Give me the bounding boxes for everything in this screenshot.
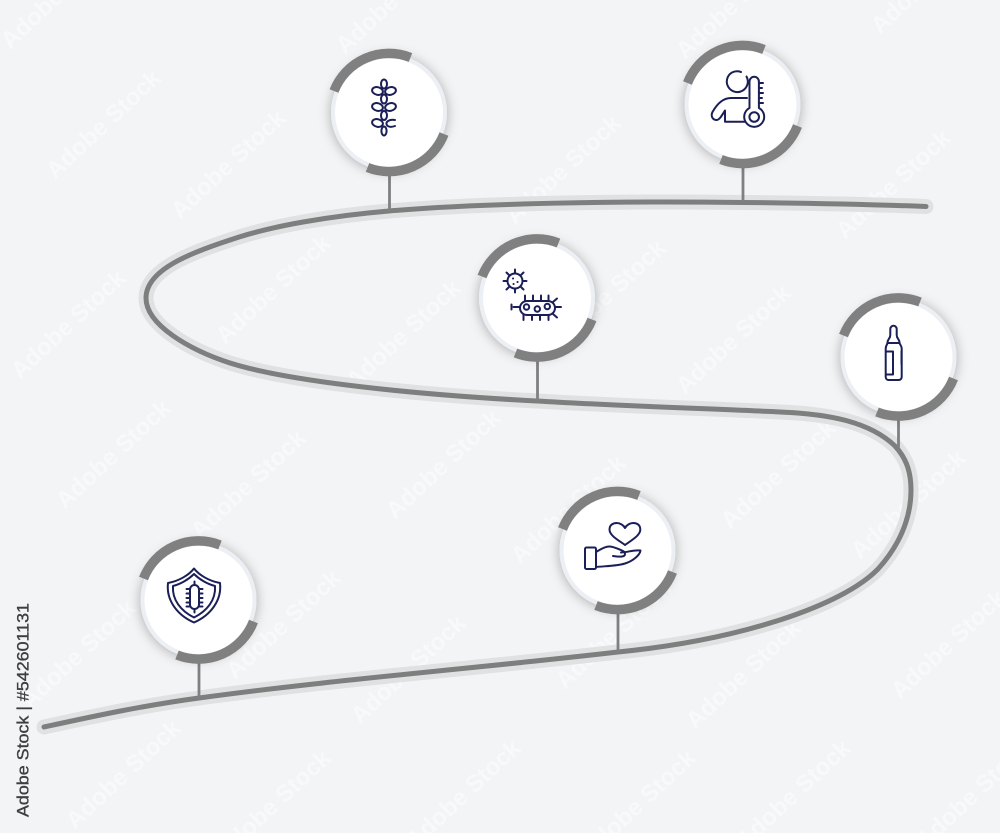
watermark pattern: Adobe Stock xyxy=(346,609,472,729)
watermark pattern: Adobe Stock xyxy=(41,64,167,184)
watermark pattern: Adobe Stock xyxy=(221,564,347,684)
watermark pattern: Adobe Stock xyxy=(51,394,177,514)
watermark pattern: Adobe Stock xyxy=(61,714,187,833)
watermark pattern: Adobe Stock xyxy=(681,614,807,734)
watermark pattern: Adobe Stock xyxy=(846,444,972,564)
watermark pattern: Adobe Stock xyxy=(186,424,312,544)
watermark pattern: Adobe Stock xyxy=(546,234,672,354)
watermark pattern: Adobe Stock xyxy=(211,229,337,349)
watermark pattern: Adobe Stock xyxy=(501,109,627,229)
icon: person and thermometer xyxy=(712,71,764,127)
icon: hand with heart xyxy=(585,523,640,569)
node: ampoule xyxy=(840,298,956,416)
icon: shield with bacterium xyxy=(168,568,220,622)
winding road timeline path xyxy=(44,202,926,727)
node: person with thermometer xyxy=(684,45,800,164)
watermark pattern: Adobe Stock xyxy=(16,594,142,714)
connector stems xyxy=(199,162,898,698)
watermark pattern: Adobe Stock xyxy=(6,264,132,384)
icon: virus and bacterium xyxy=(504,270,561,320)
node: shield with bacterium xyxy=(140,541,256,659)
node: hand holding heart xyxy=(560,491,676,610)
icon: wheat ear xyxy=(371,80,397,136)
watermark pattern: Adobe Stock xyxy=(671,279,797,399)
node: wheat xyxy=(331,53,447,172)
watermark pattern: Adobe Stock xyxy=(831,124,957,244)
node: viruses and bacteria xyxy=(479,239,595,357)
vertical stock credit text: Adobe Stock | #542601131 xyxy=(14,603,32,817)
watermark pattern: Adobe Stock xyxy=(341,274,467,394)
icon: glass ampoule xyxy=(886,326,902,380)
watermark pattern: Adobe Stock xyxy=(506,449,632,569)
watermark pattern: Adobe Stock xyxy=(381,404,507,524)
watermark pattern: Adobe Stock xyxy=(551,574,677,694)
watermark pattern: Adobe Stock xyxy=(166,104,292,224)
watermark pattern: Adobe Stock xyxy=(716,414,842,534)
